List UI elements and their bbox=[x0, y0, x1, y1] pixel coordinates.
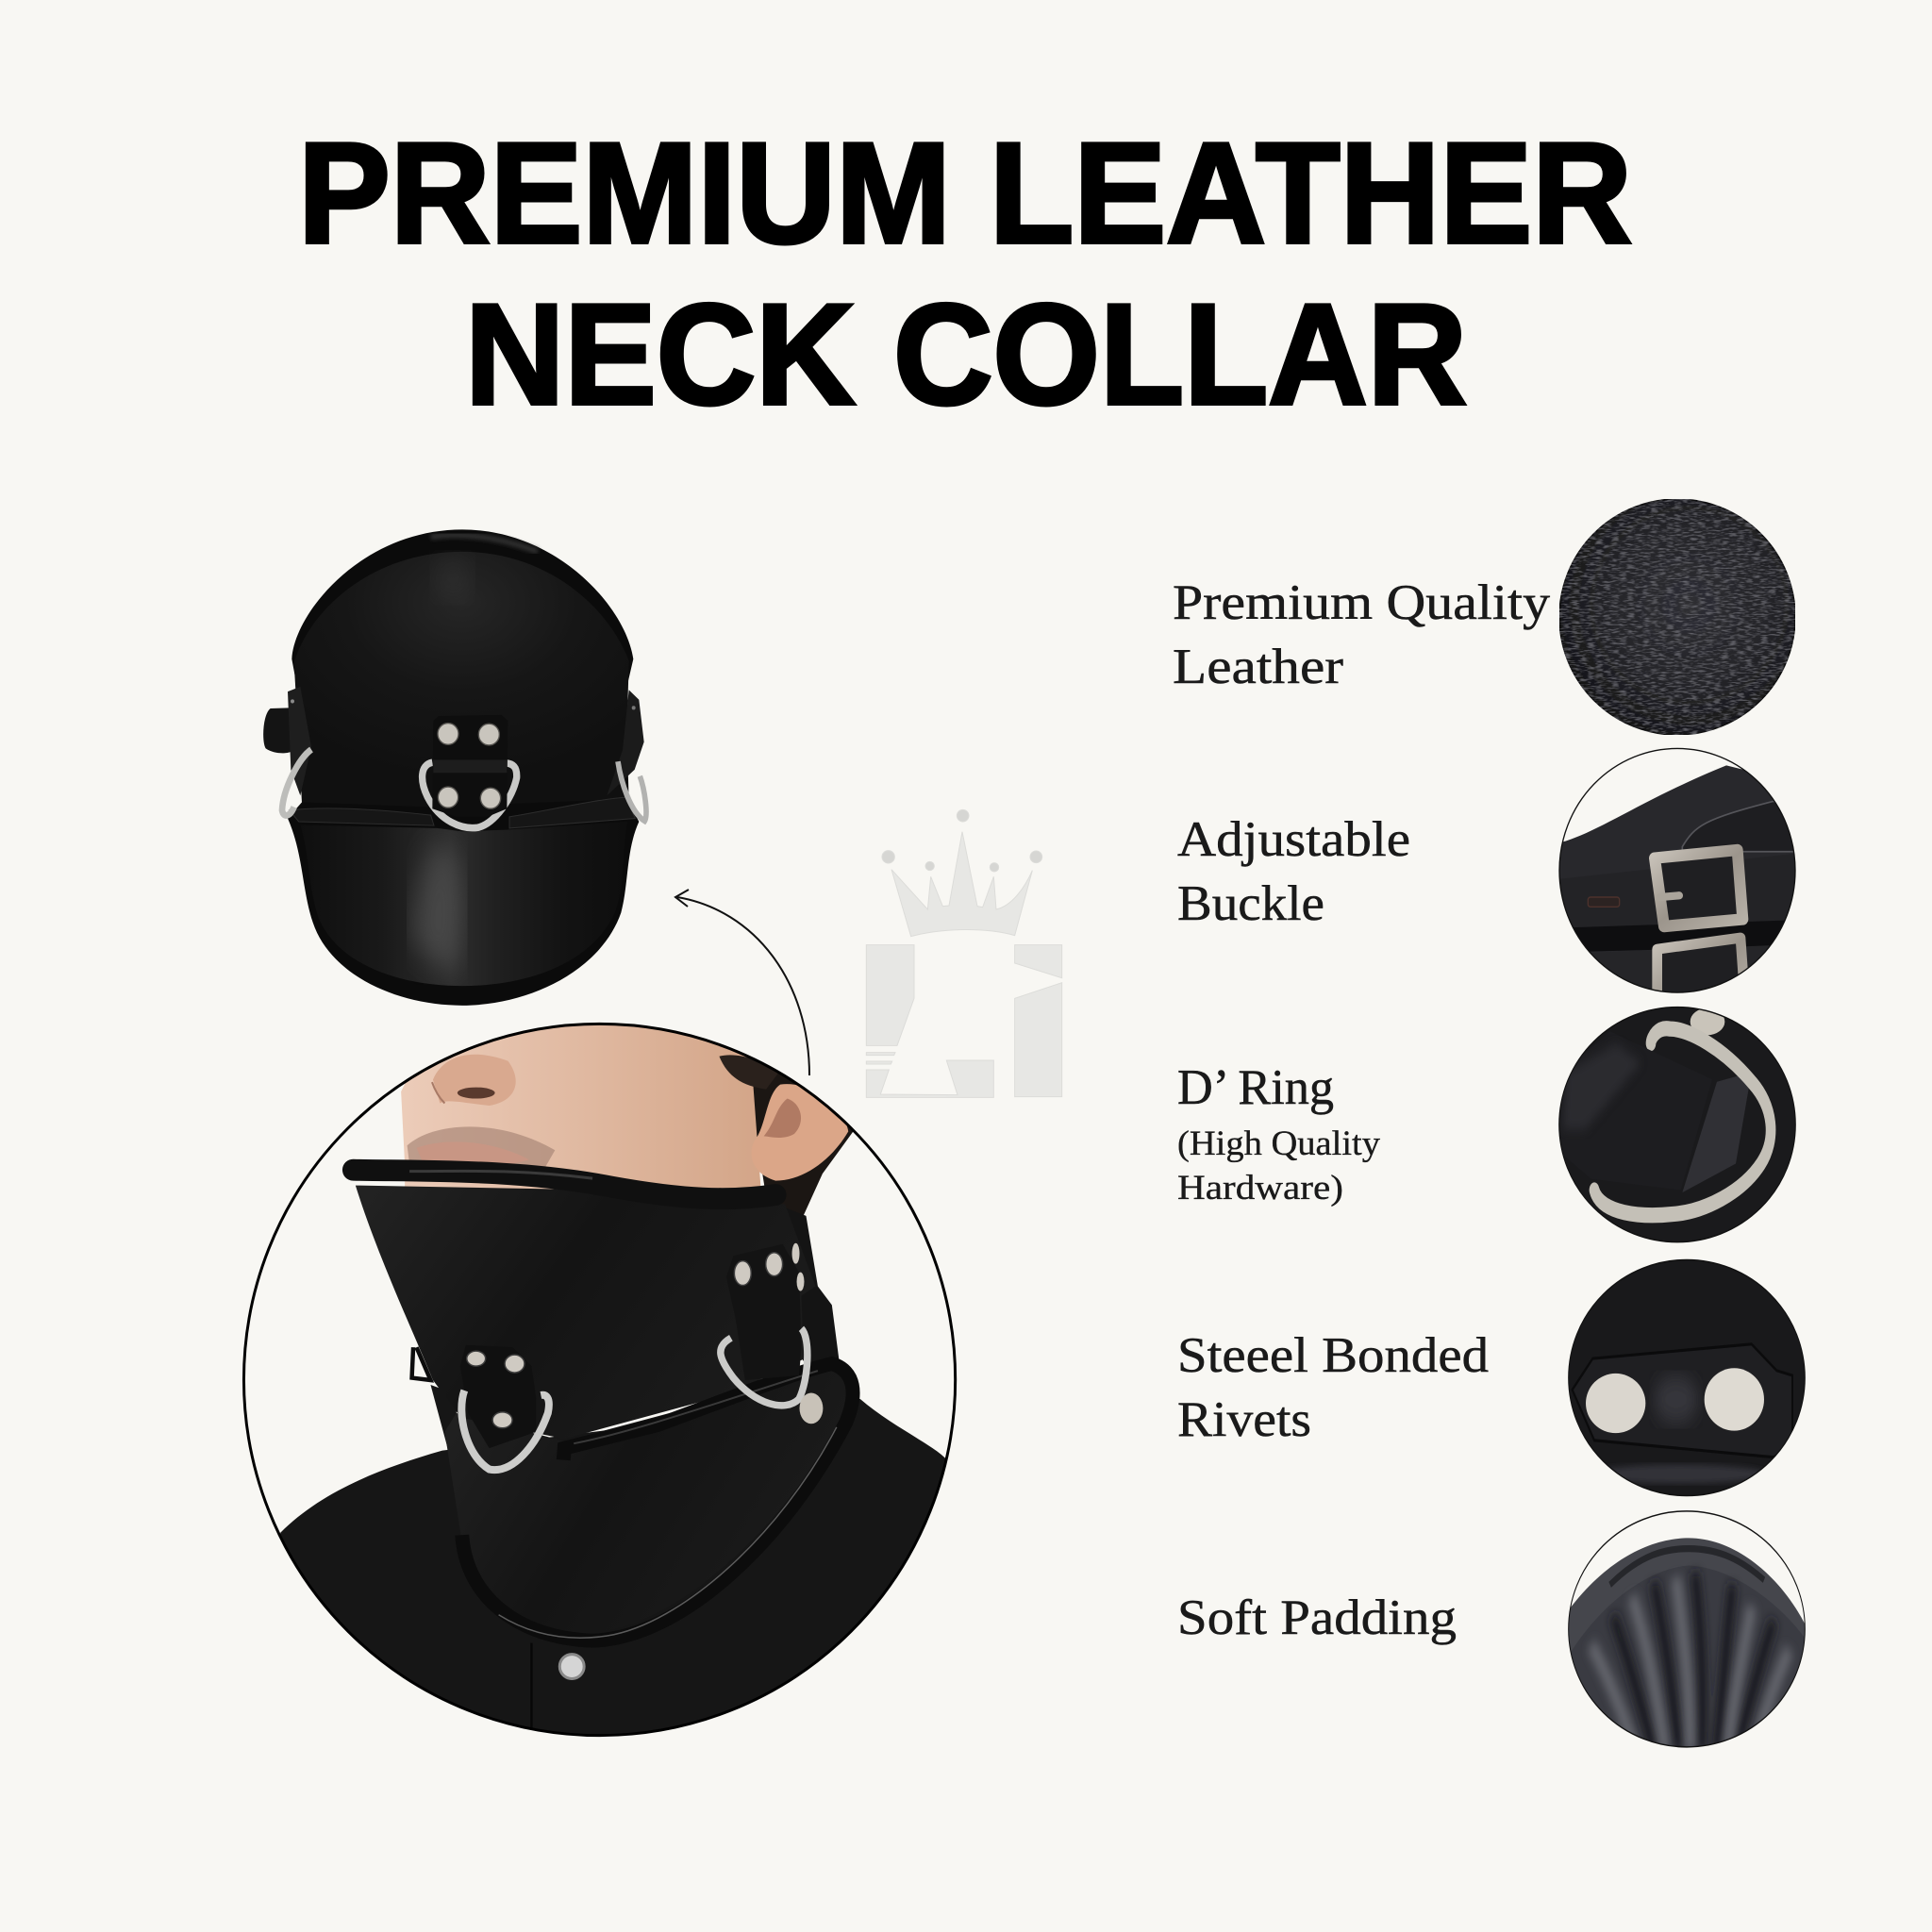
right tab bbox=[756, 1301, 802, 1379]
upper rim highlight bbox=[574, 1371, 818, 1443]
hair behind ear bbox=[753, 1074, 853, 1215]
shirt placket bbox=[530, 1643, 532, 1728]
moustache and stubble bbox=[408, 1126, 555, 1167]
upper highlight bbox=[434, 555, 472, 601]
right rivets bbox=[734, 1253, 783, 1286]
lips bbox=[417, 1141, 528, 1164]
tab bbox=[1573, 1344, 1792, 1457]
top rim bbox=[353, 1170, 775, 1199]
feature image: leather texture bbox=[1559, 499, 1795, 735]
strap sheen bbox=[1563, 1043, 1641, 1130]
ear inner bbox=[764, 1099, 801, 1138]
monogram bbox=[866, 945, 1062, 1097]
tab crease bbox=[433, 759, 507, 773]
dome rim bbox=[1566, 1538, 1808, 1751]
nostril bbox=[458, 1088, 495, 1099]
right strap bbox=[607, 690, 644, 795]
far D ring bbox=[412, 1347, 430, 1380]
inner cushion bbox=[1566, 1565, 1808, 1751]
feature image: padding bbox=[1566, 1511, 1808, 1751]
back rivets bbox=[792, 1243, 804, 1291]
strap hole bbox=[1588, 897, 1620, 907]
feature label: premium quality leather bbox=[1173, 575, 1551, 694]
left tongue strap bbox=[263, 708, 291, 753]
right D ring bbox=[618, 761, 646, 821]
base bbox=[1557, 1000, 1802, 1250]
nose shade bbox=[433, 1055, 516, 1106]
face bbox=[401, 1019, 761, 1197]
rivet right bbox=[1705, 1368, 1764, 1431]
neck panel lower bbox=[445, 1371, 846, 1479]
feature label: D ring: D’ Ring bbox=[1177, 1060, 1334, 1115]
crown dots bbox=[882, 809, 1042, 872]
far strap bbox=[430, 1385, 457, 1446]
watermark logo bbox=[866, 809, 1062, 1097]
left strap bbox=[288, 687, 311, 795]
pleats dark bbox=[1613, 1573, 1774, 1751]
upper panel bbox=[356, 1186, 815, 1439]
right D ring bbox=[721, 1328, 808, 1406]
lower panel bbox=[300, 822, 627, 986]
buckle pin bbox=[1660, 895, 1679, 897]
feature label: D ring: (High Quality bbox=[1177, 1124, 1381, 1163]
right rivet bbox=[632, 706, 636, 709]
title bbox=[298, 113, 1632, 435]
crown bbox=[891, 832, 1032, 937]
collar silhouette bbox=[288, 529, 639, 1006]
feature label: D ring: Hardware) bbox=[1177, 1169, 1343, 1208]
feature image: buckle bbox=[1557, 748, 1799, 1011]
back straps bbox=[790, 1215, 840, 1362]
rim stitching bbox=[1610, 1549, 1764, 1585]
lower highlight bbox=[412, 841, 462, 972]
buckle one bbox=[1655, 850, 1742, 926]
title: PREMIUM LEATHER bbox=[298, 113, 1632, 274]
arrow from photo to product bbox=[675, 890, 809, 1075]
feature image: D ring bbox=[1557, 1000, 1802, 1250]
pleats light bbox=[1591, 1577, 1790, 1751]
left D ring bbox=[461, 1391, 549, 1470]
front rivets bbox=[438, 724, 501, 808]
feature label: adjustable buckle: Adjustable bbox=[1177, 812, 1410, 867]
shirt button bbox=[559, 1655, 584, 1678]
temple hair bbox=[719, 1055, 780, 1090]
left tab bbox=[473, 1421, 534, 1448]
circle outline bbox=[243, 1024, 956, 1736]
base leather bbox=[1566, 1255, 1808, 1501]
outline bbox=[1559, 1008, 1795, 1242]
feature label: steel bonded rivets bbox=[1177, 1328, 1489, 1447]
lower rim bbox=[462, 1364, 853, 1641]
rivet top bbox=[1690, 1008, 1724, 1035]
feature label: steel bonded rivets: Rivets bbox=[1177, 1392, 1311, 1447]
feature image: rivets bbox=[1566, 1255, 1808, 1501]
lower gap bbox=[1557, 920, 1799, 953]
outline bbox=[1559, 748, 1795, 992]
main strap bbox=[1557, 853, 1799, 928]
feature label: premium quality leather: Leather bbox=[1173, 640, 1343, 694]
model photo circle bbox=[243, 1019, 958, 1760]
outline bbox=[1569, 1260, 1805, 1496]
rim highlight bbox=[499, 1427, 837, 1638]
left rivets bbox=[467, 1351, 525, 1428]
horizontal band bbox=[290, 797, 635, 828]
title: NECK COLLAR bbox=[465, 275, 1467, 435]
rim sheen bbox=[409, 1171, 592, 1178]
lone rivet bbox=[800, 1392, 823, 1424]
infographic canvas bbox=[242, 142, 1806, 1748]
feature label: D ring bbox=[1177, 1060, 1381, 1208]
upper panel bbox=[294, 552, 629, 807]
outline bbox=[1569, 1511, 1805, 1747]
diagonal tab bbox=[1682, 1073, 1752, 1192]
rim sheen bbox=[431, 535, 538, 552]
left rivets bbox=[291, 699, 294, 704]
feature label: adjustable buckle bbox=[1177, 812, 1410, 931]
feature label: soft padding: Soft Padding bbox=[1177, 1591, 1457, 1645]
front D ring bbox=[423, 762, 517, 828]
feature label: adjustable buckle: Buckle bbox=[1177, 876, 1324, 931]
buckle two bbox=[1657, 938, 1745, 1011]
nose outline bbox=[432, 1082, 444, 1104]
lower sheen bbox=[1591, 1464, 1767, 1484]
tab sheen bbox=[1654, 1375, 1698, 1424]
padding bbox=[1557, 765, 1799, 998]
feature label: steel bonded rivets: Steeel Bonded bbox=[1177, 1328, 1489, 1383]
ear bbox=[752, 1084, 848, 1181]
front tab bbox=[432, 715, 508, 817]
upper strap line bbox=[1682, 801, 1799, 852]
shirt bbox=[280, 1398, 945, 1734]
rivet left bbox=[1586, 1374, 1645, 1433]
D ring metal bbox=[1594, 1028, 1771, 1215]
left D ring bbox=[282, 749, 311, 815]
product photo: collar front view bbox=[263, 529, 646, 1006]
feature label: premium quality leather: Premium Quality bbox=[1173, 575, 1551, 630]
lower strap bbox=[1557, 944, 1799, 998]
strap bbox=[1557, 1031, 1712, 1191]
